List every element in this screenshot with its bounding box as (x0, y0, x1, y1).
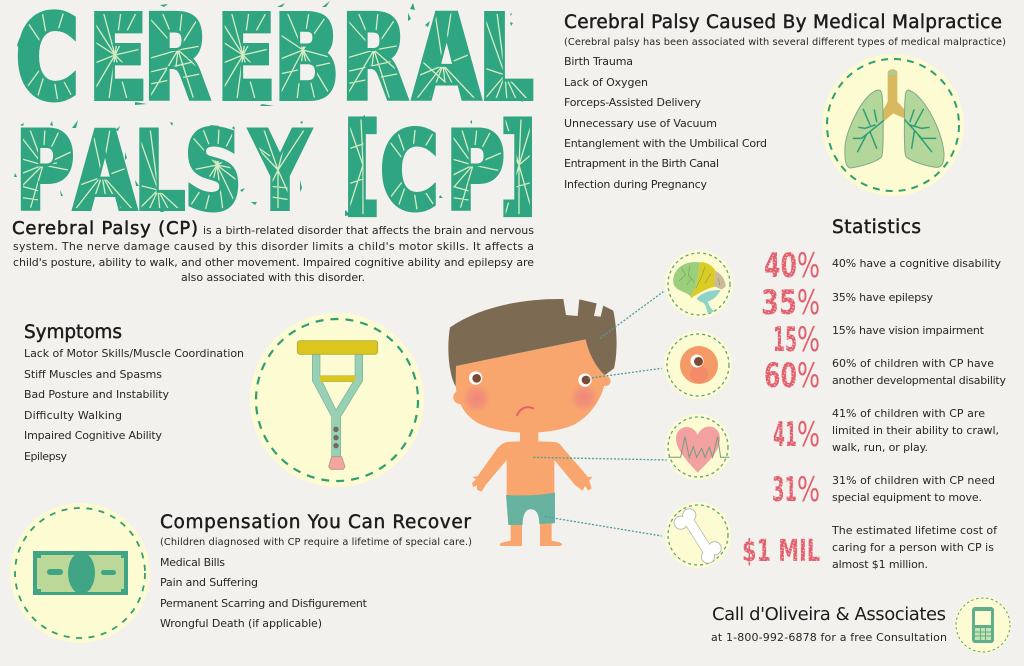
list: malpractice causes: Entrapment in the Birth Canal (564, 157, 719, 170)
list: malpractice causes: Infection during Pregnancy (564, 178, 707, 191)
stat: 40%: 40 (764, 246, 797, 286)
intro paragraph: is a birth-related disorder that affects the brain and nervous (203, 224, 534, 237)
icon: crutch (250, 313, 424, 487)
list: malpractice causes (564, 55, 767, 191)
mouth (517, 407, 533, 415)
heading: symptoms: Symptoms (24, 322, 122, 343)
intro paragraph: system. The nerve damage caused by this disorder limits a child's motor skills. It affects a (13, 240, 534, 253)
stat: 35%: 35 (761, 283, 797, 323)
heading: statistics: Statistics (832, 217, 921, 238)
panel: medical malpractice (564, 12, 1006, 196)
face (456, 339, 606, 433)
stat: 40% (764, 246, 1001, 286)
panel: call to action (711, 596, 1012, 654)
stat: 31%: special equipment to move. (832, 491, 982, 504)
icon: money (10, 503, 150, 643)
connector: brain (600, 292, 663, 338)
phone number: at 1-800-992-6878 for a free Consultation (711, 631, 947, 644)
icon: lungs (822, 54, 964, 196)
list: malpractice causes: Birth Trauma (564, 55, 633, 68)
list: symptoms: Epilepsy (24, 450, 67, 463)
boy illustration (448, 292, 667, 546)
list: compensation (160, 556, 368, 630)
heading: compensation: Compensation You Can Recover (160, 512, 471, 533)
list: malpractice causes: Unnecessary use of Vacuum (564, 117, 717, 130)
stat: 60%: % (797, 356, 820, 396)
list: malpractice causes: Lack of Oxygen (564, 76, 648, 89)
list: compensation: Medical Bills (160, 556, 225, 569)
stat: 35%: % (797, 283, 820, 323)
stat: 41%: limited in their ability to crawl, (832, 424, 999, 437)
stat: 35% (761, 283, 933, 323)
dotted connector lines (533, 457, 667, 536)
list: symptoms (24, 347, 244, 463)
intro paragraph: child's posture, ability to walk, and other movement. Impaired cognitive ability and epilepsy are (13, 256, 534, 269)
stat: 60%: another developmental disability (832, 374, 1006, 387)
stat: 31%: % (797, 470, 820, 510)
list: symptoms: Lack of Motor Skills/Muscle Coordination (24, 347, 244, 360)
stat: 40%: 40% have a cognitive disability (832, 257, 1001, 270)
stat: lifetime cost: The estimated lifetime cost of (831, 524, 998, 537)
intro paragraph (12, 218, 534, 284)
list: malpractice causes: Forceps-Assisted Delivery (564, 96, 701, 109)
shorts (506, 493, 555, 525)
list: compensation: Pain and Suffering (160, 576, 258, 589)
stat: 15%: % (797, 320, 820, 360)
stat: lifetime cost (742, 524, 998, 571)
hair (448, 299, 617, 387)
list: symptoms: Bad Posture and Instability (24, 388, 169, 401)
stat: 41%: % (797, 415, 820, 455)
stat: 60%: 60% of children with CP have (832, 357, 994, 370)
panel: compensation (10, 503, 472, 643)
intro paragraph: also associated with this disorder. (181, 271, 365, 284)
title (13, 0, 537, 234)
intro paragraph: Cerebral Palsy (CP) (12, 218, 198, 239)
stat: 41% (773, 407, 999, 455)
list: symptoms: Stiff Muscles and Spasms (24, 368, 162, 381)
heading: malpractice: Cerebral Palsy Caused By Medical Malpractice (564, 12, 1002, 33)
legs and feet (500, 520, 562, 546)
stat: lifetime cost: almost $1 million. (832, 558, 928, 571)
neck, torso and arms (472, 430, 593, 498)
stat: 60%: 60 (764, 356, 797, 396)
ears (453, 376, 611, 404)
stat: 31%: 31% of children with CP need (832, 474, 995, 487)
stat: 40%: % (797, 246, 820, 286)
stat: lifetime cost: caring for a person with CP is (832, 541, 994, 554)
list: compensation: Wrongful Death (if applicable) (160, 617, 322, 630)
panel: statistics (742, 217, 1006, 571)
stat: 31% (772, 470, 995, 510)
panel: symptoms (24, 313, 424, 487)
stat: 15% (773, 320, 985, 360)
list: symptoms: Difficulty Walking (24, 409, 122, 422)
stat: lifetime cost: $1 MIL (742, 534, 820, 569)
connector: eye (588, 368, 662, 378)
eyes (469, 371, 592, 387)
icon: heart (665, 414, 731, 480)
cheeks (463, 383, 598, 412)
list: malpractice causes: Entanglement with the Umbilical Cord (564, 137, 767, 150)
stat: 15%: 15 (773, 320, 797, 360)
stat: 60% (764, 356, 1006, 396)
stat: 41%: 41% of children with CP are (832, 407, 985, 420)
heading: call: Call d'Oliveira & Associates (712, 604, 946, 625)
icon: phone (954, 596, 1012, 654)
subheading: compensation: (Children diagnosed with CP require a lifetime of special care.) (160, 537, 472, 548)
stat: 31%: 31 (772, 470, 797, 510)
icon: brain (665, 250, 733, 318)
list: compensation: Permanent Scarring and Disfigurement (160, 597, 368, 610)
stat: 35%: 35% have epilepsy (832, 291, 933, 304)
icon: eye (664, 331, 732, 399)
subheading: malpractice: (Cerebral palsy has been associated with several different types of medical malpractice) (564, 37, 1006, 48)
stat: 15%: 15% have vision impairment (832, 324, 985, 337)
stat: 41%: 41 (773, 415, 797, 455)
list: symptoms: Impaired Cognitive Ability (24, 429, 162, 442)
stat: 41%: walk, run, or play. (832, 441, 928, 454)
icon: bone (665, 502, 731, 568)
